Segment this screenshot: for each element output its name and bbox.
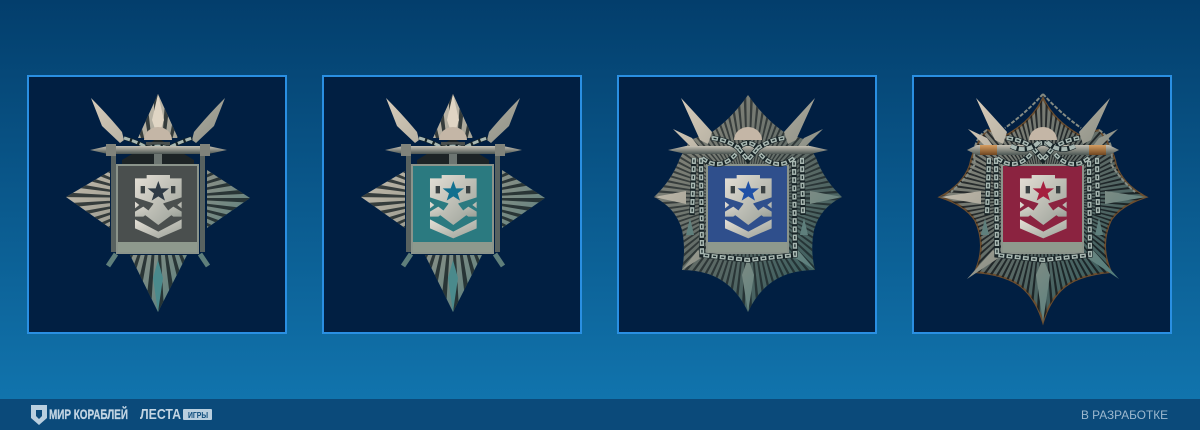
logo: publisher: ИГРЫ	[188, 411, 208, 420]
medal: crimson	[940, 94, 1146, 322]
logo: game name: МИР КОРАБЛЕЙ	[49, 405, 128, 422]
panel: crimson medal	[913, 76, 1171, 333]
panel: grey medal	[28, 76, 286, 333]
footer bar	[0, 399, 1200, 430]
panel: blue medal	[618, 76, 876, 333]
chains	[981, 138, 1103, 260]
chains	[686, 138, 808, 260]
medal: blue	[654, 95, 842, 312]
status label: В РАЗРАБОТКЕ	[1081, 410, 1168, 422]
panel: teal medal	[323, 76, 581, 333]
icon: shield logo	[31, 405, 47, 425]
logo: publisher: ЛЕСТА	[140, 406, 181, 423]
medal: teal	[361, 94, 545, 312]
logo: publisher	[140, 406, 212, 423]
medal: grey	[66, 94, 250, 312]
